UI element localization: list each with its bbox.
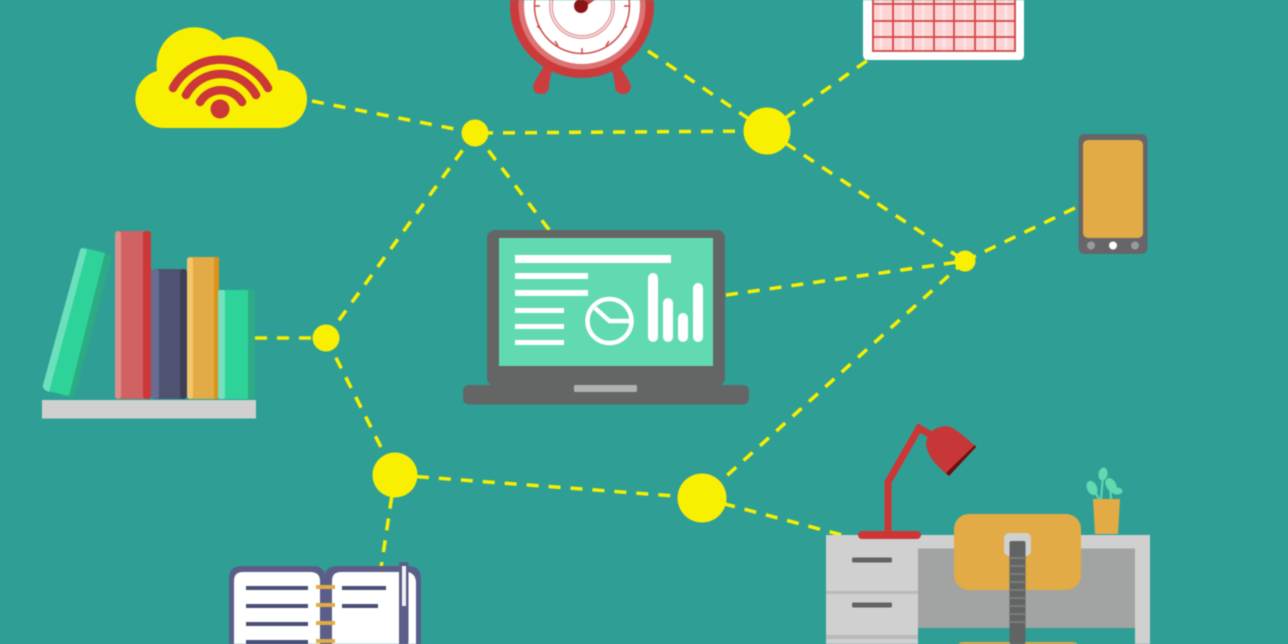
red book (115, 231, 151, 399)
navy book (151, 269, 187, 399)
icon: desk lamp (858, 426, 976, 539)
orange book (187, 257, 219, 399)
icon: potted plant (1085, 467, 1122, 534)
laptop screen (499, 238, 713, 366)
pen bookmark (399, 562, 408, 644)
network nodes (312, 108, 976, 522)
icon: office chair (954, 514, 1081, 644)
icon: bookshelf (42, 231, 256, 418)
icon: wifi cloud (135, 27, 307, 128)
icon: laptop with dashboard (463, 230, 749, 404)
icon: calendar (863, 0, 1024, 60)
icon: alarm clock (510, 0, 654, 94)
leaning green book (43, 248, 112, 398)
icon: smartphone (1078, 134, 1148, 254)
green book (218, 290, 255, 399)
icon: open notebook (229, 562, 421, 644)
dashed network connections (255, 51, 1077, 568)
icon: desk (826, 535, 1150, 644)
